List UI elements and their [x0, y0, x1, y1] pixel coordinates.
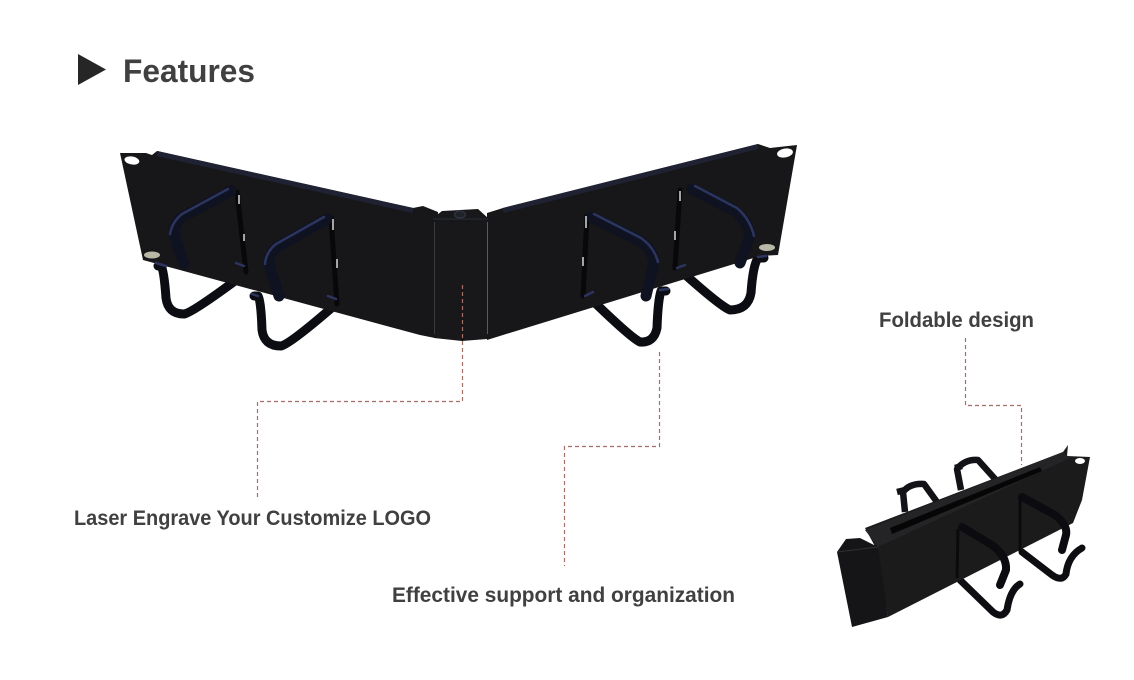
- left wing panel: [120, 151, 438, 338]
- hook back stays: [957, 497, 1020, 578]
- label: foldable design: Foldable design: [879, 309, 1034, 332]
- hook blue highlights: [156, 186, 766, 299]
- leader line: logo: [258, 285, 462, 498]
- rear lower hooks: [158, 258, 764, 346]
- label: laser engrave: Laser Engrave Your Customize LOGO: [74, 507, 431, 530]
- label: support and organization: Effective support and organization: [392, 584, 735, 607]
- mounting hole: [1075, 458, 1085, 464]
- hook back stays: [237, 190, 680, 304]
- icon: heading triangle: [78, 54, 106, 85]
- leader line: foldable: [966, 338, 1022, 465]
- main product: V-shaped cable manager: [120, 144, 797, 346]
- lower front hooks behind body: [960, 548, 1082, 615]
- mounting holes: [124, 155, 140, 166]
- main body: [865, 445, 1090, 617]
- top rail: [865, 452, 1070, 547]
- title: Features: [123, 53, 255, 89]
- front upper hooks: [174, 189, 750, 296]
- centre hinge block: [433, 209, 488, 341]
- top slot: [890, 467, 1042, 534]
- hinge screw: [454, 211, 466, 218]
- leader line: support: [564, 352, 660, 566]
- front upper hooks: [962, 497, 1066, 585]
- slot highlights: [239, 191, 680, 268]
- end block: [837, 538, 888, 627]
- right wing panel: [487, 144, 797, 340]
- folded product: foldable view: [837, 445, 1090, 627]
- rear hooks: [897, 460, 996, 512]
- top edge highlights: [157, 154, 413, 210]
